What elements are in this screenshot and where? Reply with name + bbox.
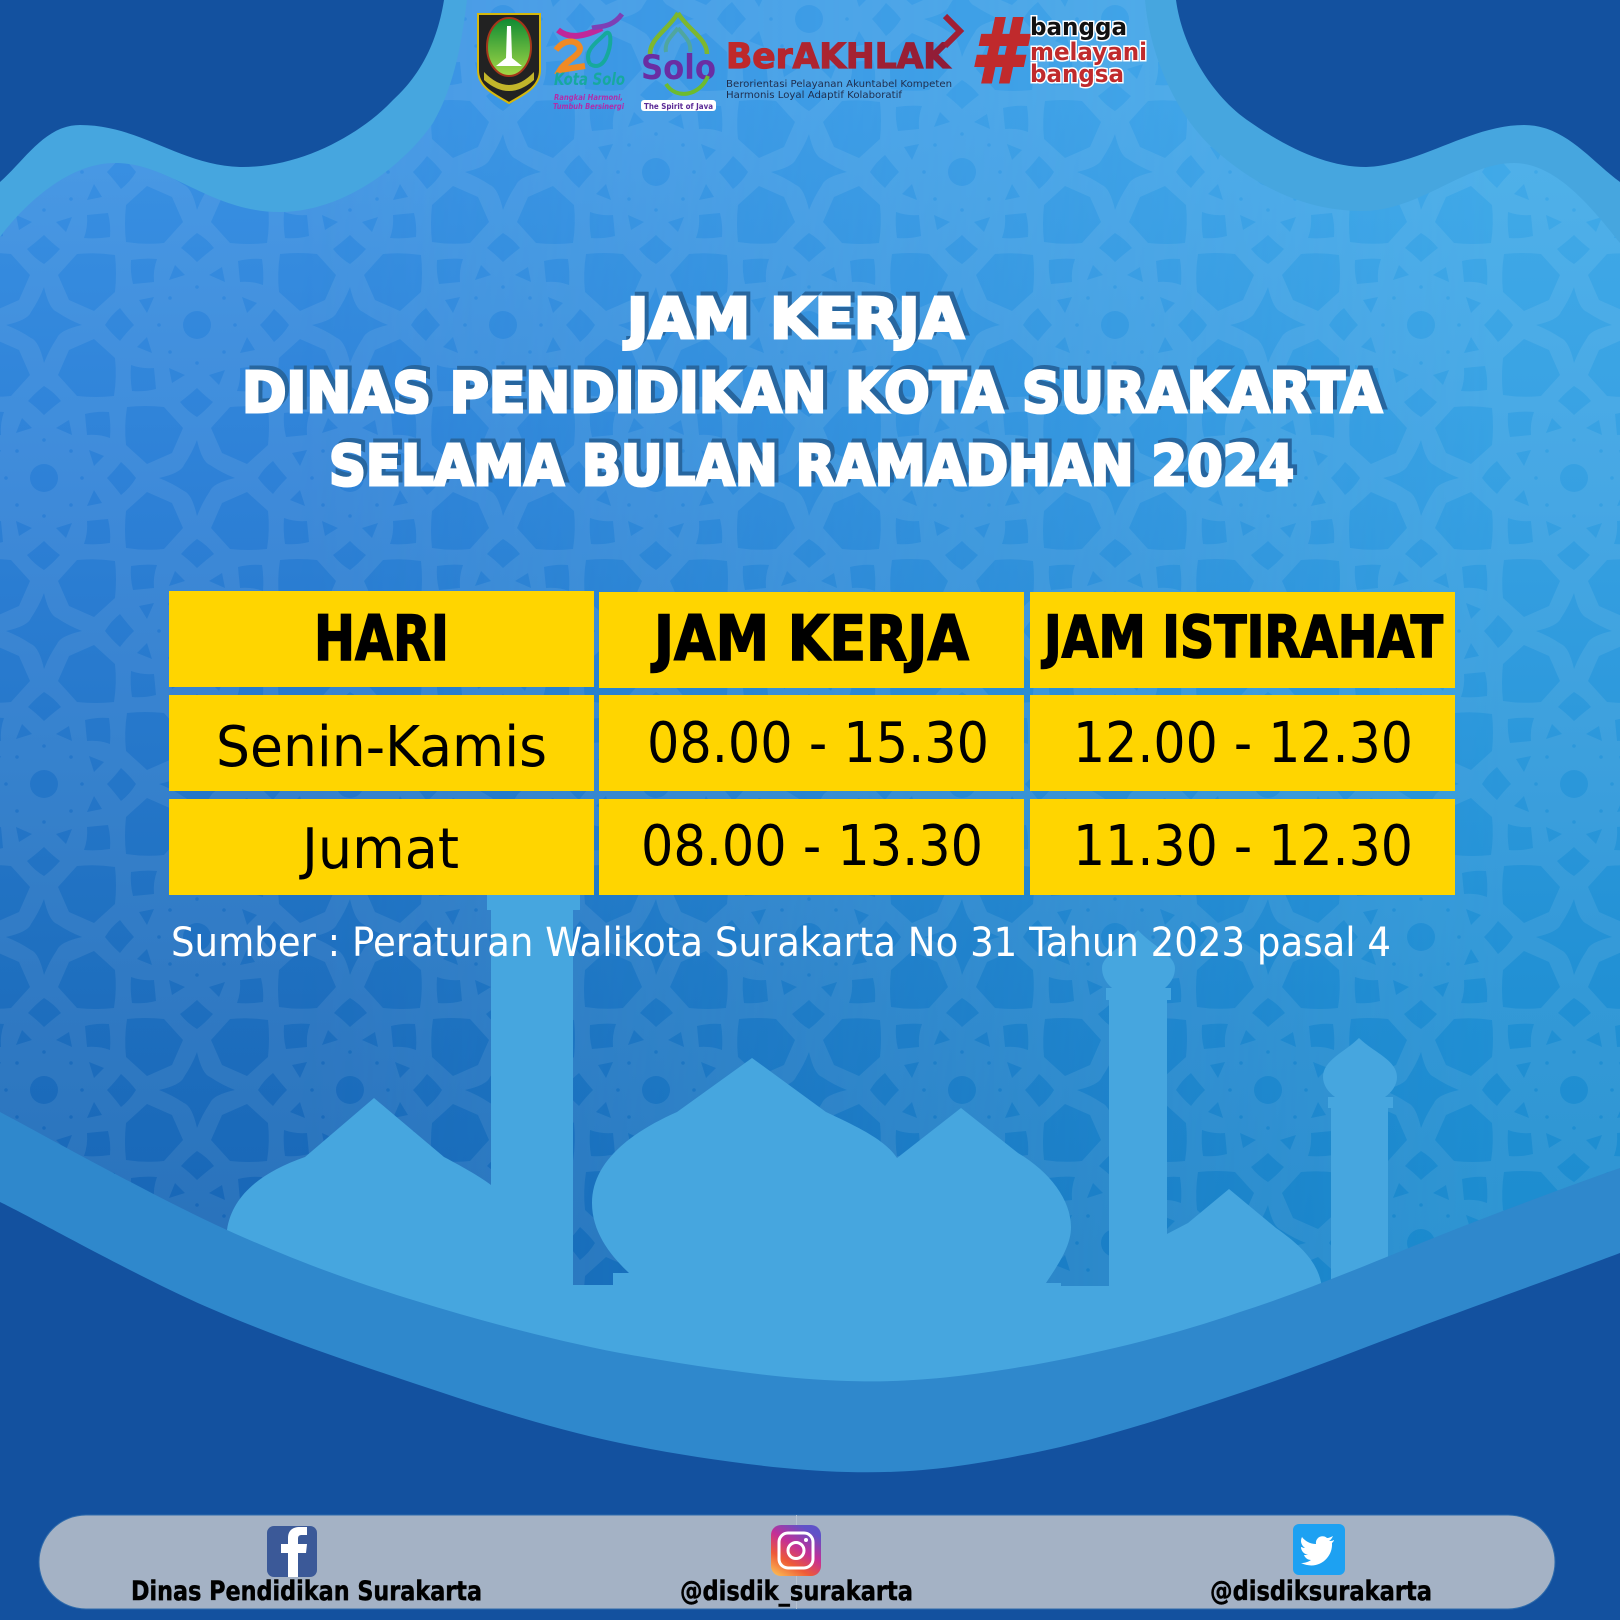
logo: Solo The Spirit of Java (641, 13, 716, 111)
source note: Sumber : Peraturan Walikota Surakarta No 31 Tahun 2023 pasal 4 (171, 920, 1391, 966)
twitter icon (1293, 1524, 1345, 1575)
top right dark wave (1176, 0, 1620, 182)
row cell: senin-kamis jam kerja: 08.00 - 15.30 (647, 711, 989, 776)
row cell: jumat: Jumat (299, 817, 459, 882)
Kota Solo tagline: Rangkai Harmoni, (554, 93, 623, 102)
top right wave band (1145, 0, 1620, 243)
row cell: senin-kamis istirahat (1030, 695, 1455, 791)
header cell: jam istirahat: JAM ISTIRAHAT (1041, 603, 1443, 671)
logo: BerAKHLAK (726, 16, 960, 101)
logo: bangga melayani bangsa: melayani (1030, 38, 1147, 66)
row cell: senin-kamis jam kerja (599, 695, 1024, 791)
logo: bangga melayani bangsa: # (971, 0, 1030, 103)
background: gradient blue (0, 0, 1620, 1286)
right minaret (1323, 1038, 1397, 1400)
BerAKHLAK subtitle (726, 79, 952, 101)
BerAKHLAK chevron (945, 16, 960, 46)
mosque silhouette (227, 895, 1397, 1400)
row cell: jumat (169, 799, 594, 895)
lower curved band (0, 1112, 1620, 1620)
lower dark area (0, 1202, 1620, 1620)
title (242, 287, 1383, 499)
left dome (227, 1098, 491, 1400)
row cell: senin-kamis istirahat: 12.00 - 12.30 (1073, 711, 1413, 776)
facebook icon (267, 1526, 317, 1577)
row cell: jumat jam kerja (599, 799, 1024, 895)
header cell: hari: HARI (314, 602, 449, 675)
Solo tagline pill (641, 100, 716, 111)
row cell: jumat istirahat: 11.30 - 12.30 (1073, 814, 1413, 879)
logo: bangga melayani bangsa (971, 0, 1147, 103)
logo: Solo The Spirit of Java: The Spirit of Java (644, 102, 713, 111)
row cell: senin-kamis (169, 695, 594, 791)
BerAKHLAK subtitle: Berorientasi Pelayanan Akuntabel Kompeten (726, 79, 952, 90)
title: JAM KERJA (623, 287, 965, 352)
row cell: senin-kamis: Senin-Kamis (216, 715, 547, 780)
schedule table (169, 591, 1455, 895)
header cell: jam istirahat (1030, 592, 1455, 688)
footer social bar (39, 1515, 1555, 1609)
twitter label: @disdiksurakarta (1210, 1576, 1432, 1607)
facebook label: Dinas Pendidikan Surakarta (131, 1576, 482, 1607)
logo: Surakarta shield (478, 14, 540, 103)
left minaret (487, 895, 580, 1400)
logo: bangga melayani bangsa: bangga (1030, 13, 1127, 41)
small right dome (1165, 1189, 1322, 1400)
logo row (478, 0, 1147, 111)
instagram label: @disdik_surakarta (680, 1576, 913, 1607)
header cell: jam kerja: JAM KERJA (651, 602, 969, 675)
row cell: jumat jam kerja: 08.00 - 13.30 (641, 814, 983, 879)
instagram icon (771, 1525, 821, 1576)
Solo wordmark: Solo (641, 48, 716, 88)
logo: Kota Solo anniversary (553, 14, 625, 111)
central domes (573, 1058, 1112, 1400)
background: islamic geometric pattern (0, 0, 1620, 1286)
Kota Solo tagline (553, 93, 624, 111)
row cell: jumat istirahat (1030, 799, 1455, 895)
title: SELAMA BULAN RAMADHAN 2024 (329, 434, 1294, 499)
header cell: hari (169, 591, 594, 687)
Kota Solo tagline: Tumbuh Bersinergi (553, 102, 624, 111)
top left dark wave (0, 0, 444, 182)
middle right minaret (1102, 930, 1175, 1400)
logo: BerAKHLAK: BerAKHLAK (726, 37, 952, 77)
title: DINAS PENDIDIKAN KOTA SURAKARTA (242, 361, 1383, 426)
logo: bangga melayani bangsa: bangsa (1030, 60, 1124, 88)
Kota Solo wordmark: Kota Solo (554, 70, 625, 90)
BerAKHLAK subtitle: Harmonis Loyal Adaptif Kolaboratif (726, 90, 902, 101)
header cell: jam kerja (599, 592, 1024, 688)
top left wave band (0, 0, 467, 237)
